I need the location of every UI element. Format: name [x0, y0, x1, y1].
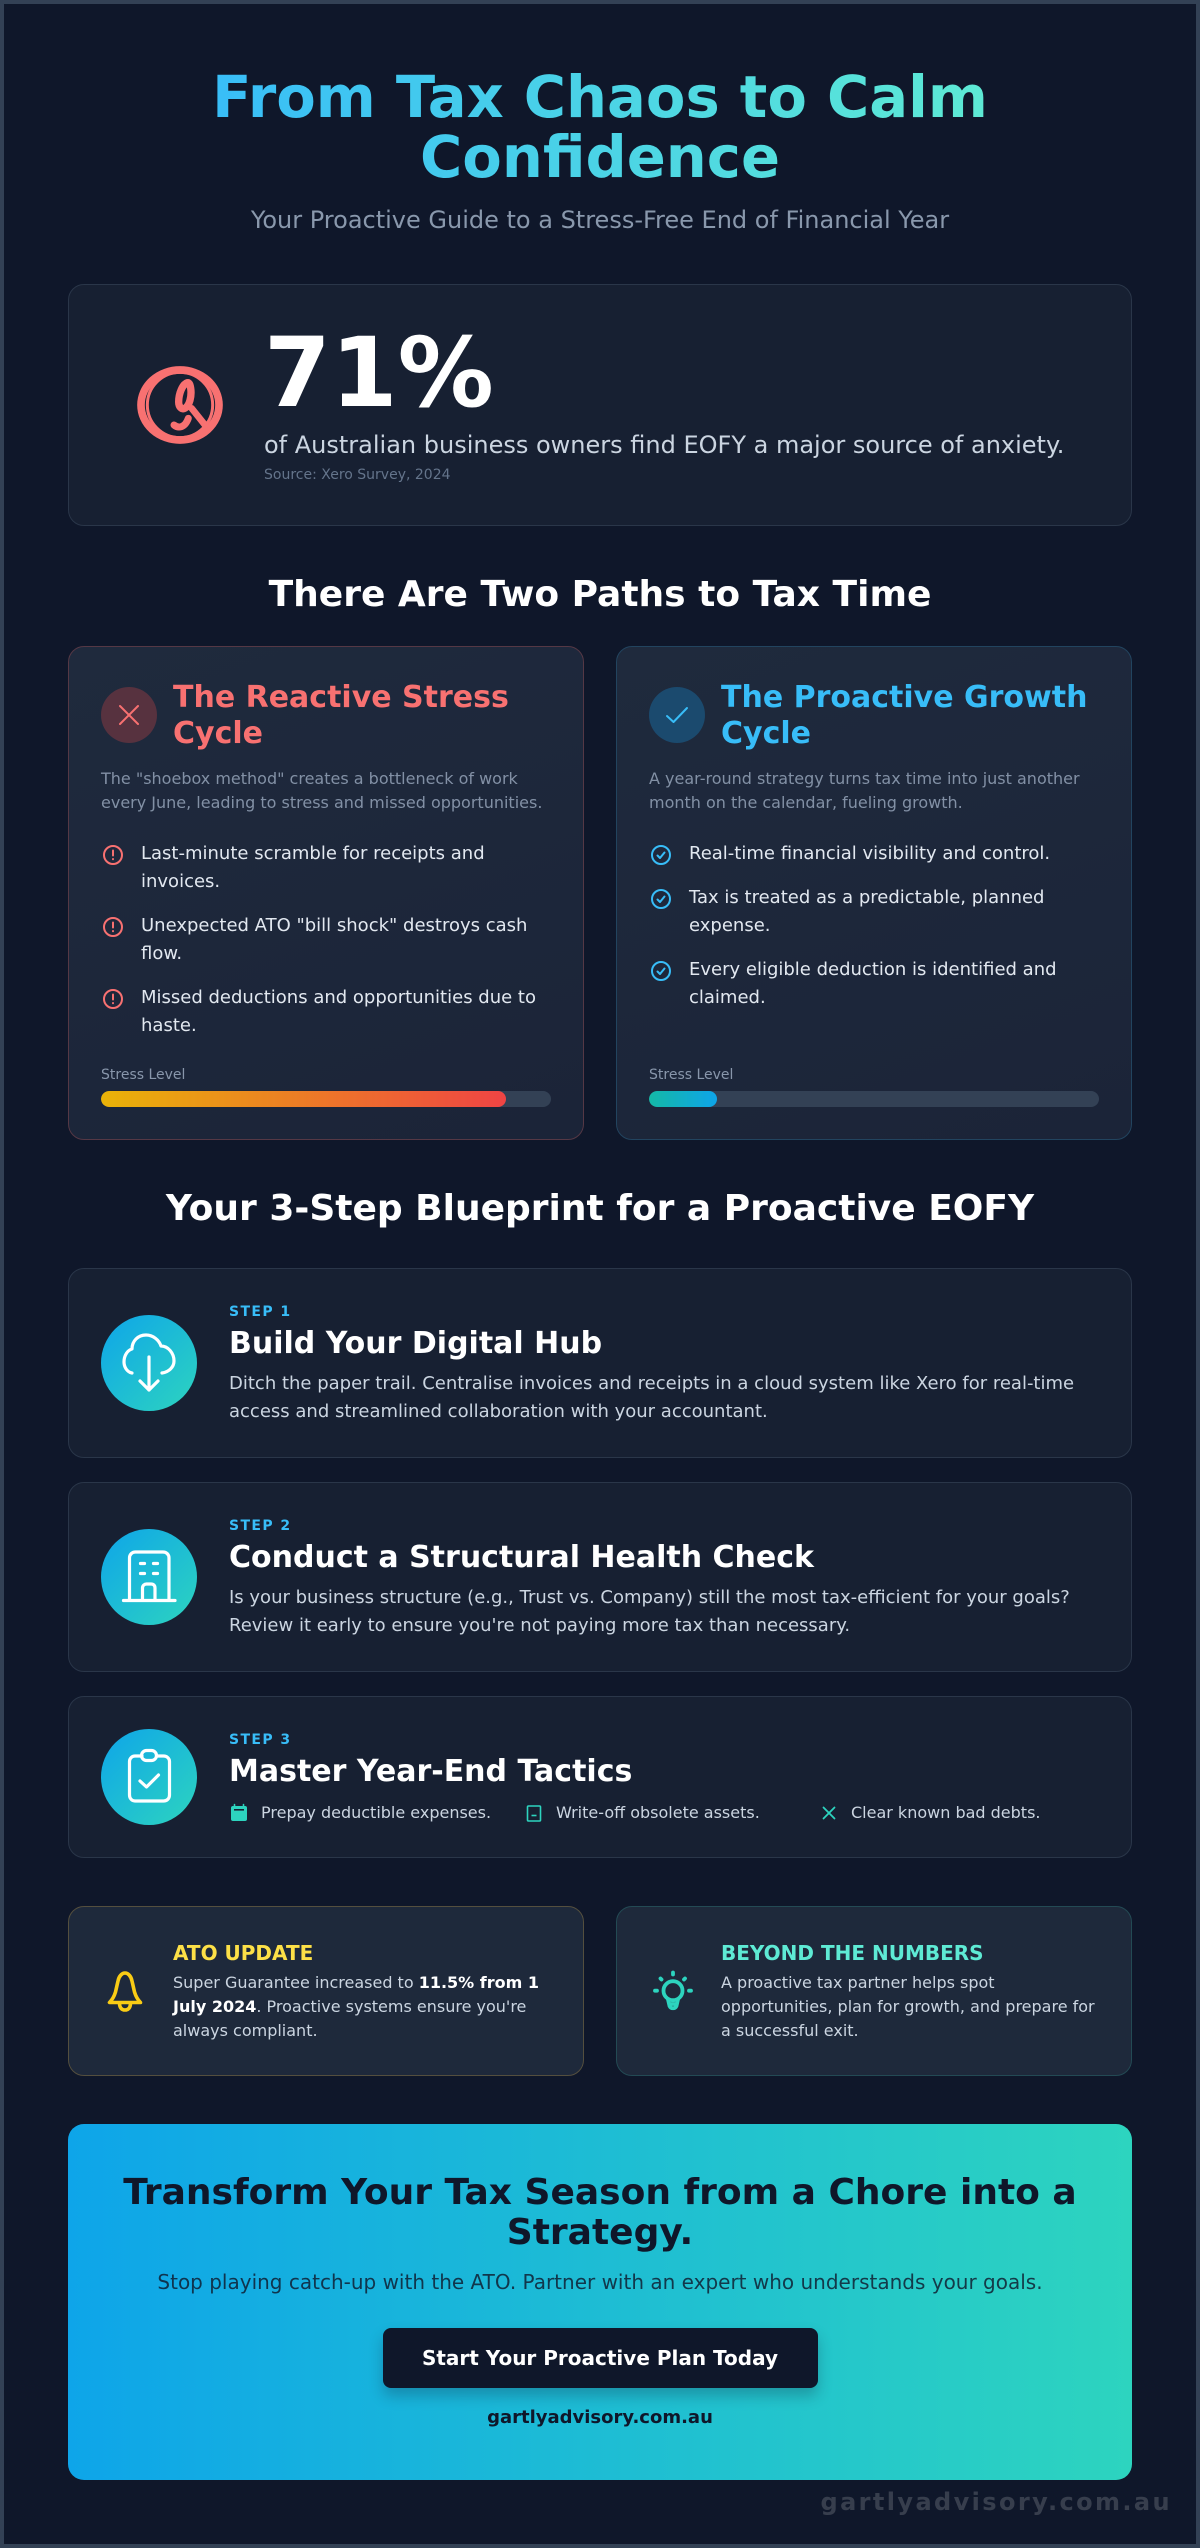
icon: bell: [108, 1971, 142, 2012]
stress level bar: low: [649, 1091, 1099, 1107]
step description: Is your business structure (e.g., Trust vs. Company) still the most tax-efficient for your goals? Review it early to ensure you're not paying more tax than necessary.: [229, 1587, 1070, 1636]
info title: ATO UPDATE: [173, 1941, 313, 1965]
step text: [229, 1518, 1070, 1636]
stress level label: Stress Level: [101, 1067, 185, 1083]
step title: Build Your Digital Hub: [229, 1326, 602, 1361]
website link: gartlyadvisory.com.au: [487, 2407, 713, 2428]
tactic: bad debts: Clear known bad debts.: [851, 1803, 1040, 1822]
tactic: write-off: Write-off obsolete assets.: [556, 1803, 760, 1822]
CTA text: Stop playing catch-up with the ATO. Partner with an expert who understands your goals.: [157, 2270, 1043, 2294]
benefit item: Every eligible deduction is identified and claimed.: [689, 959, 1057, 1008]
icon: anxiety symbol: [137, 366, 223, 444]
step text: [229, 1304, 1074, 1422]
panel: step 3: [68, 1696, 1132, 1858]
panel: reactive stress cycle: [68, 646, 584, 1140]
two paths comparison: [68, 646, 1132, 1140]
info title: BEYOND THE NUMBERS: [721, 1941, 984, 1965]
problem item: Unexpected ATO "bill shock" destroys cash flow.: [141, 915, 527, 964]
card header: [649, 680, 1087, 751]
subtitle: Your Proactive Guide to a Stress-Free End of Financial Year: [251, 206, 949, 234]
panel: proactive growth cycle: [616, 646, 1132, 1140]
card title: The Proactive Growth Cycle: [721, 680, 1087, 751]
title: Confidence: [420, 124, 780, 191]
heading: blueprint: Your 3-Step Blueprint for a Proactive EOFY: [166, 1188, 1034, 1229]
step label: STEP 1: [229, 1304, 291, 1320]
CTA button: [382, 2328, 818, 2388]
step description: Ditch the paper trail. Centralise invoices and receipts in a cloud system like Xero for real-time access and streamlined collaboration with your accountant.: [229, 1373, 1074, 1422]
card header: [101, 680, 509, 751]
step label: STEP 3: [229, 1732, 291, 1748]
card description: The "shoebox method" creates a bottleneck of work every June, leading to stress and missed opportunities.: [101, 769, 542, 812]
icon: cross: [101, 687, 157, 743]
icon: light bulb: [653, 1970, 693, 2010]
step title: Master Year-End Tactics: [229, 1754, 632, 1789]
info cards row: [68, 1906, 1132, 2076]
step title: Conduct a Structural Health Check: [229, 1540, 814, 1575]
benefit item: Real-time financial visibility and control.: [689, 843, 1050, 864]
info body: A proactive tax partner helps spot opportunities, plan for growth, and prepare for a successful exit.: [721, 1973, 1095, 2040]
source: Source: Xero Survey, 2024: [264, 467, 451, 483]
heading: two paths: There Are Two Paths to Tax Time: [269, 574, 931, 615]
CTA button: Start Your Proactive Plan Today: [422, 2346, 778, 2370]
panel: ATO update: [68, 1906, 584, 2076]
tactics row: [231, 1803, 1040, 1822]
card description: A year-round strategy turns tax time into just another month on the calendar, fueling growth.: [649, 769, 1080, 812]
title: [205, 68, 995, 188]
icon: cloud download: [101, 1315, 197, 1411]
step label: STEP 2: [229, 1518, 291, 1534]
CTA heading: Transform Your Tax Season from a Chore into a Strategy.: [123, 2172, 1077, 2253]
statistic description: of Australian business owners find EOFY a major source of anxiety.: [264, 431, 1064, 459]
info text: [721, 1941, 1095, 2040]
card title: The Reactive Stress Cycle: [173, 680, 509, 751]
info text: [172, 1941, 539, 2040]
title: From Tax Chaos to Calm: [212, 64, 988, 131]
info body: Super Guarantee increased to 11.5% from 1 July 2024. Proactive systems ensure you're always compliant.: [173, 1973, 539, 2040]
icon: clipboard check: [101, 1729, 197, 1825]
watermark: gartlyadvisory.com.au: [820, 2488, 1172, 2516]
tactic: prepay: Prepay deductible expenses.: [261, 1803, 491, 1822]
panel: call to action: [68, 2124, 1132, 2480]
list of problems: [103, 843, 536, 1036]
list of benefits: [651, 843, 1057, 1008]
panel: 71% statistic: [68, 284, 1132, 526]
icon: building: [101, 1529, 197, 1625]
problem item: Missed deductions and opportunities due to haste.: [141, 987, 536, 1036]
panel: step 1: [68, 1268, 1132, 1458]
panel: step 2: [68, 1482, 1132, 1672]
benefit item: Tax is treated as a predictable, planned expense.: [689, 887, 1044, 936]
big number: 71%: [264, 317, 494, 429]
icon: check: [649, 687, 705, 743]
step text: [229, 1732, 1040, 1822]
problem item: Last-minute scramble for receipts and invoices.: [141, 843, 485, 892]
stress level label: Stress Level: [649, 1067, 733, 1083]
panel: beyond the numbers: [616, 1906, 1132, 2076]
statistic text: [264, 317, 1064, 483]
stress level bar: high: [101, 1091, 551, 1107]
